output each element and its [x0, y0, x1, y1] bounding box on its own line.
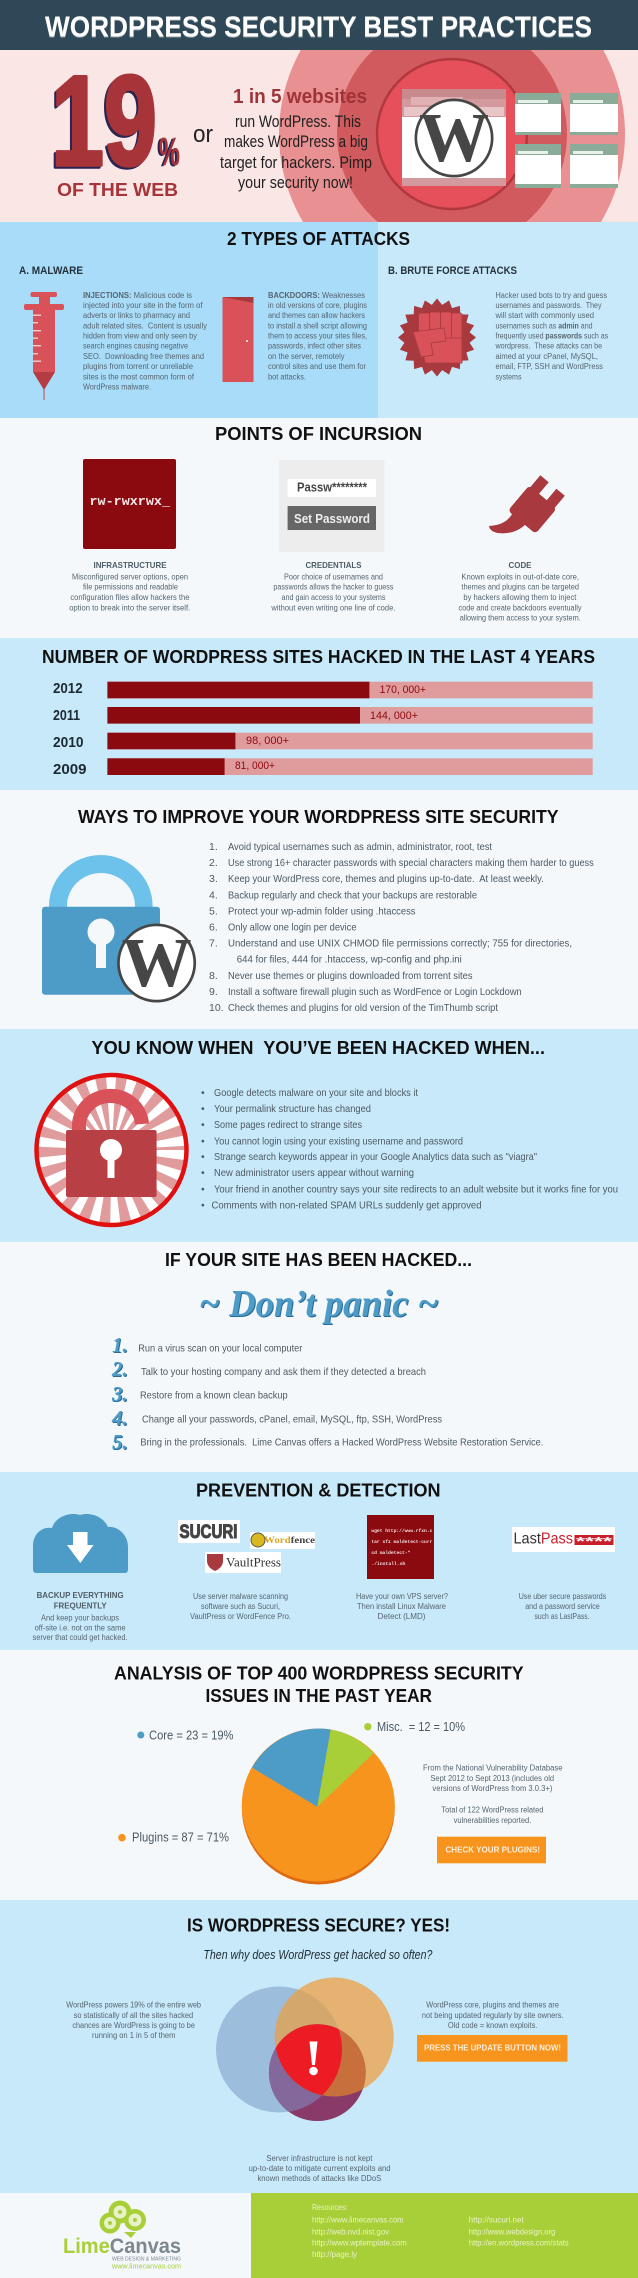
heading: ISSUES IN THE PAST YEAR — [206, 1686, 432, 1706]
source note — [423, 1764, 563, 1825]
numbered list: 10. — [209, 1002, 224, 1014]
source note: Sept 2012 to Sept 2013 (includes old — [430, 1774, 554, 1783]
numbered list: 1. — [209, 841, 218, 853]
icon: file permissions: rw-rwxrwx_ — [90, 494, 170, 509]
heading: IS WORDPRESS SECURE? YES! — [187, 1916, 450, 1936]
caption: backup: server that could get hacked. — [32, 1633, 128, 1642]
bullet list — [201, 1087, 618, 1212]
caption: vps — [356, 1592, 448, 1621]
caption: backup — [32, 1590, 128, 1642]
bullet list: • — [201, 1087, 205, 1099]
legend: misc: Misc. = 12 = 10% — [377, 1719, 465, 1734]
steps: 1. — [112, 1333, 128, 1357]
resources list — [312, 2203, 569, 2259]
resources list: http://sucuri.net — [469, 2216, 524, 2225]
icon: password form — [279, 460, 384, 552]
bullet list: • — [201, 1167, 205, 1179]
icon: gears cloud — [100, 2200, 146, 2238]
text: infrastructure: INFRASTRUCTURE — [94, 560, 167, 570]
bullet list: Google detects malware on your site and blocks it — [214, 1087, 418, 1099]
text: backdoors — [268, 291, 367, 381]
button: check your plugins — [437, 1837, 546, 1863]
subheading: Then why does WordPress get hacked so often? — [203, 1947, 433, 1962]
numbered list: Use strong 16+ character passwords with special characters making them harder to guess — [228, 857, 594, 869]
text: credentials: without even writing one line of code. — [270, 603, 395, 612]
1 in 5 websites text: your security now! — [238, 174, 353, 192]
1 in 5 websites text: run WordPress. This — [235, 113, 361, 131]
1 in 5 websites text: target for hackers. Pimp — [220, 154, 372, 172]
steps: Run a virus scan on your local computer — [138, 1343, 303, 1355]
bullet list: • — [201, 1151, 205, 1163]
heading: POINTS OF INCURSION — [215, 424, 422, 444]
subheading: malware: A. MALWARE — [19, 265, 83, 277]
bullet list: Your permalink structure has changed — [214, 1103, 371, 1115]
or: or — [193, 121, 213, 148]
text: code: by hackers allowing them to inject — [463, 593, 577, 602]
text: injections: hidden from view and only seen by — [83, 332, 197, 340]
source note: Total of 122 WordPress related — [441, 1806, 543, 1815]
resources list: http://www.webdesign.org — [469, 2227, 555, 2236]
caption: backup: And keep your backups — [41, 1614, 119, 1623]
numbered list: 5. — [209, 905, 218, 917]
text: right venn note: not being updated regularly by site owners. — [422, 2011, 564, 2020]
icon: padlock with wordpress logo — [42, 855, 196, 1002]
caption: malware scanning: VaultPress or WordFence Pro. — [190, 1612, 291, 1621]
panel: if hacked — [0, 1242, 638, 1472]
icon: password form: Passw******** — [297, 480, 368, 495]
panel: analysis of issues — [0, 1650, 638, 1900]
bullet list: • — [201, 1103, 205, 1115]
caption: malware scanning — [190, 1592, 291, 1621]
numbered list: Avoid typical usernames such as admin, administrator, root, test — [228, 841, 492, 853]
logo: lime canvas: www.limecanvas.com — [111, 2263, 181, 2270]
text: credentials: CREDENTIALS — [306, 560, 362, 570]
panel: sites hacked bar chart — [0, 638, 638, 790]
panel: 2 types of attacks — [0, 222, 638, 418]
text: code: themes and plugins can be targeted — [461, 583, 579, 592]
text: injections: search engines causing negative — [83, 342, 188, 351]
steps — [111, 1333, 543, 1454]
heading: YOU KNOW WHEN YOU’VE BEEN HACKED WHEN... — [92, 1038, 545, 1058]
source note: From the National Vulnerability Database — [423, 1764, 563, 1773]
bullet list: • — [201, 1200, 205, 1212]
bar 2011 — [53, 707, 593, 724]
text: injections: adult related sites. Content is usually — [83, 321, 207, 330]
caption: backup: BACKUP EVERYTHING — [37, 1590, 124, 1600]
logo: lastpass: LastPass — [514, 1530, 573, 1548]
text: infrastructure — [69, 560, 190, 612]
bar 2010: 98, 000+ — [246, 735, 289, 747]
text: infrastructure: file permissions and readable — [83, 583, 178, 592]
text: right venn note — [422, 2001, 564, 2030]
numbered list: Backup regularly and check that your backups are restorable — [228, 889, 477, 901]
icon: door — [222, 297, 254, 382]
text: brute force: usernames and passwords. They — [496, 301, 602, 310]
resources list: http://en.wordpress.com/stats — [469, 2239, 569, 2248]
numbered list: Check themes and plugins for old version of the TimThumb script — [228, 1002, 498, 1014]
text: credentials: and gain access to your systems — [282, 593, 386, 602]
caption: passwords — [519, 1592, 606, 1621]
subheading: brute force: B. BRUTE FORCE ATTACKS — [388, 265, 517, 277]
steps: 3. — [111, 1382, 128, 1406]
numbered list: 9. — [209, 986, 218, 998]
text: backdoors: on the server, remotely — [268, 352, 344, 361]
1 in 5 websites text: 1 in 5 websites — [233, 86, 367, 108]
logo: wordfence — [250, 1532, 315, 1549]
caption: vps: Then install Linux Malware — [357, 1602, 447, 1611]
steps: Bring in the professionals. Lime Canvas offers a Hacked WordPress Website Restoration Service. — [140, 1437, 543, 1449]
text: bottom venn note: known methods of attacks like DDoS — [258, 2174, 381, 2183]
bullet list: Strange search keywords appear in your Google Analytics data such as "viagra" — [214, 1151, 537, 1163]
numbered list: Understand and use UNIX CHMOD file permissions correctly; 755 for directories, — [228, 938, 572, 950]
resources list: http://www.wptemplate.com — [312, 2239, 407, 2248]
resources list: http://www.limecanvas.com — [312, 2216, 404, 2225]
numbered list: 644 for files, 444 for .htaccess, wp-config and php.ini — [237, 954, 462, 966]
button: check your plugins: CHECK YOUR PLUGINS! — [446, 1845, 540, 1855]
text: bottom venn note — [249, 2154, 391, 2183]
bullet list: Some pages redirect to strange sites — [214, 1119, 362, 1131]
icon: padlock with wordpress logo: W — [122, 925, 192, 1002]
text: credentials: Poor choice of usernames and — [284, 572, 383, 581]
text: backdoors: and themes can allow hackers — [268, 311, 365, 320]
text: brute force: usernames such as admin and — [496, 321, 592, 330]
icon: syringe — [24, 292, 64, 400]
text: infrastructure: option to break into the server itself. — [69, 603, 190, 612]
caption: backup: off-site i.e. not on the same — [35, 1624, 126, 1633]
numbered list: Keep your WordPress core, themes and plugins up-to-date. At least weekly. — [228, 873, 544, 885]
text: brute force: frequently used passwords such as — [496, 332, 608, 340]
bar 2012: 2012 — [53, 680, 83, 697]
panel: hero statistic — [0, 50, 638, 222]
text: brute force: wordpress. These attacks can be — [495, 342, 603, 351]
logo: sucuri: SUCURI — [180, 1522, 238, 1543]
source note: versions of WordPress from 3.0.3+) — [432, 1784, 553, 1793]
numbered list: Protect your wp-admin folder using .htaccess — [228, 905, 416, 917]
text: injections: adverts or links to pharmacy and — [83, 311, 190, 320]
text: bottom venn note: up-to-date to mitigate current exploits and — [249, 2164, 391, 2173]
bar 2012: 170, 000+ — [380, 684, 426, 696]
text: code: code and create backdoors eventually — [458, 603, 582, 612]
caption: vps: Have your own VPS server? — [356, 1592, 448, 1601]
icon: terminal: tar xfz maldetect-curr — [371, 1539, 433, 1545]
title: WORDPRESS SECURITY BEST PRACTICES — [45, 12, 592, 44]
source note: vulnerabilities reported. — [454, 1816, 531, 1825]
text: brute force: aimed at your cPanel, MySQL, — [496, 352, 598, 361]
heading: WAYS TO IMPROVE YOUR WORDPRESS SITE SECURITY — [78, 807, 559, 827]
text: infrastructure: Misconfigured server options, open — [72, 572, 188, 581]
big number 19%: 19 — [51, 50, 157, 193]
bar 2012 — [53, 680, 593, 698]
panel: prevention and detection — [0, 1472, 638, 1650]
target rings — [279, 50, 625, 222]
icon: cloud download — [33, 1514, 128, 1573]
logo: wordfence: Word fence — [264, 1535, 315, 1545]
bullet list: Comments with non-related SPAM URLs suddenly get approved — [212, 1200, 482, 1212]
text: left venn note: WordPress powers 19% of the entire web — [66, 2001, 201, 2010]
text: credentials — [270, 560, 395, 612]
text: backdoors: to install a shell script allowing — [268, 321, 367, 330]
text: left venn note: running on 1 in 5 of them — [92, 2031, 176, 2040]
steps: 2. — [111, 1357, 128, 1381]
steps: Talk to your hosting company and ask them if they detected a breach — [141, 1366, 426, 1378]
text: backdoors: control sites and use them for — [268, 362, 366, 371]
text: backdoors: bot attacks. — [268, 372, 306, 381]
big number 19%: % — [159, 130, 180, 174]
bullet list: • — [201, 1136, 205, 1148]
caption: vps: Detect (LMD) — [378, 1612, 426, 1621]
bullet list: You cannot login using your existing username and password — [214, 1136, 463, 1148]
text: injections: injected into your site in the form of — [83, 301, 203, 310]
text: credentials: passwords allows the hacker to guess — [273, 583, 393, 592]
text: left venn note: chances are WordPress is going to be — [72, 2021, 195, 2030]
heading: NUMBER OF WORDPRESS SITES HACKED IN THE LAST 4 YEARS — [42, 647, 595, 667]
caption: backup: FREQUENTLY — [54, 1601, 107, 1611]
panel: points of incursion — [0, 418, 638, 638]
text: brute force: systems — [496, 372, 522, 381]
button: press the update button — [417, 2035, 568, 2062]
text: infrastructure: configuration files allow hackers the — [70, 593, 190, 602]
caption: passwords: such as LastPass. — [534, 1612, 590, 1621]
legend: core: Core = 23 = 19% — [149, 1727, 234, 1742]
icon: open padlock in red sunburst — [36, 1075, 186, 1225]
icon: wordpress logo: W — [419, 100, 489, 177]
numbered list: 2. — [209, 857, 218, 869]
caption: malware scanning: software such as Sucuri, — [201, 1602, 280, 1611]
text: code: Known exploits in out-of-date core, — [461, 572, 579, 581]
text: right venn note: Old code = known exploits. — [448, 2021, 537, 2030]
small browser windows — [515, 93, 618, 188]
panel: ways to improve security — [0, 790, 638, 1029]
exclamation mark — [309, 2042, 318, 2075]
panel: is wordpress secure — [0, 1900, 638, 2193]
icon: terminal — [367, 1515, 434, 1579]
1 in 5 websites text: makes WordPress a big — [224, 133, 368, 151]
resources list: Resources: — [312, 2203, 347, 2212]
numbered list: 8. — [209, 970, 218, 982]
text: injections — [83, 291, 207, 392]
steps: Change all your passwords, cPanel, email, MySQL, ftp, SSH, WordPress — [142, 1413, 442, 1425]
heading: ANALYSIS OF TOP 400 WORDPRESS SECURITY — [114, 1663, 524, 1683]
logo: lime canvas: WEB DESIGN & MARKETING — [112, 2257, 181, 2263]
pie chart — [242, 1728, 395, 1884]
text: injections: SEO. Downloading free themes and — [83, 352, 204, 361]
icon: terminal: ./install.sh — [371, 1561, 406, 1567]
numbered list: 3. — [209, 873, 218, 885]
header banner — [0, 0, 638, 50]
legend: plugins: Plugins = 87 = 71% — [132, 1830, 229, 1845]
text: injections: sites is the most common form of — [83, 372, 195, 381]
heading — [114, 1663, 524, 1706]
bar 2010: 2010 — [53, 734, 84, 751]
text: left venn note: so statistically of all the sites hacked — [74, 2011, 193, 2020]
steps: 5. — [112, 1430, 128, 1454]
logo: lastpass: **** — [576, 1534, 613, 1548]
footer — [0, 2193, 638, 2278]
icon: plug — [489, 474, 566, 534]
bar 2009 — [53, 758, 593, 778]
bar 2011: 144, 000+ — [370, 710, 418, 722]
logo: vaultpress: VaultPress — [226, 1555, 281, 1570]
text: code — [458, 560, 582, 622]
logo: vaultpress — [205, 1552, 281, 1573]
bullet list: • — [201, 1184, 205, 1196]
logo: lastpass — [512, 1527, 615, 1552]
icon: password form: Set Password — [294, 511, 370, 526]
text: backdoors: them to access your sites files, — [268, 332, 367, 340]
text: brute force: Hacker used bots to try and guess — [496, 291, 607, 300]
steps: Restore from a known clean backup — [140, 1390, 288, 1402]
text: code: CODE — [508, 560, 532, 570]
text: code: allowing them access to your system. — [460, 613, 581, 622]
resources list: http://page.ly — [312, 2250, 357, 2259]
steps: 4. — [111, 1406, 128, 1430]
big browser window — [402, 89, 506, 186]
bar 2009: 81, 000+ — [235, 760, 275, 772]
numbered list: 7. — [209, 938, 218, 950]
numbered list: 6. — [209, 921, 218, 933]
text: injections: plugins from torrent or unreliable — [83, 362, 194, 371]
text: injections: WordPress malware. — [83, 383, 151, 392]
numbered list: 4. — [209, 889, 218, 901]
heading: IF YOUR SITE HAS BEEN HACKED... — [165, 1250, 472, 1270]
text: injections: INJECTIONS: Malicious code is — [83, 291, 192, 300]
text: brute force: email, FTP, SSH and WordPress — [496, 362, 603, 371]
bullet list: New administrator users appear without warning — [214, 1167, 414, 1179]
heading: PREVENTION & DETECTION — [196, 1481, 441, 1501]
1 in 5 websites text — [220, 86, 372, 192]
icon: terminal: cd maldetect-* — [371, 1550, 411, 1556]
icon: file permissions — [83, 459, 176, 549]
icon: fist badge — [398, 298, 476, 376]
bullet list: • — [201, 1119, 205, 1131]
logo: lime canvas — [63, 2200, 181, 2270]
caption: passwords: Use uber secure passwords — [519, 1592, 606, 1601]
resources list: http://web.nvd.nist.gov — [312, 2227, 389, 2236]
bar 2011: 2011 — [53, 707, 80, 724]
venn diagram — [216, 1978, 394, 2121]
panel: hacked symptoms — [0, 1029, 638, 1242]
text: right venn note: WordPress core, plugins and themes are — [426, 2001, 559, 2010]
numbered list: Only allow one login per device — [228, 921, 357, 933]
text: bottom venn note: Server infrastructure is not kept — [266, 2154, 373, 2163]
text: brute force — [495, 291, 608, 381]
text: brute force: will start with commonly used — [495, 311, 594, 320]
heading: 2 TYPES OF ATTACKS — [227, 229, 410, 249]
icon: terminal: wget http://www.rfxn.c — [371, 1528, 433, 1534]
bar 2009: 2009 — [53, 761, 86, 778]
text: backdoors: BACKDOORS: Weaknesses — [268, 291, 365, 300]
don't panic: ~ Don’t panic ~ — [199, 1283, 439, 1325]
button: press the update button: PRESS THE UPDATE BUTTON NOW! — [424, 2043, 561, 2053]
logo: lime canvas: LimeCanvas — [63, 2235, 181, 2258]
text: left venn note — [66, 2001, 201, 2040]
of the web: OF THE WEB — [57, 180, 178, 200]
text: backdoors: in old versions of core, plugins — [268, 301, 367, 310]
caption: passwords: and a password service — [525, 1602, 600, 1611]
numbered list: Never use themes or plugins downloaded from torrent sites — [228, 970, 472, 982]
text: backdoors: passwords, infect other sites — [268, 342, 361, 351]
numbered list: Install a software firewall plugin such as WordFence or Login Lockdown — [228, 986, 522, 998]
bar 2010 — [53, 733, 593, 751]
numbered list — [209, 841, 594, 1014]
caption: malware scanning: Use server malware scanning — [193, 1592, 288, 1601]
